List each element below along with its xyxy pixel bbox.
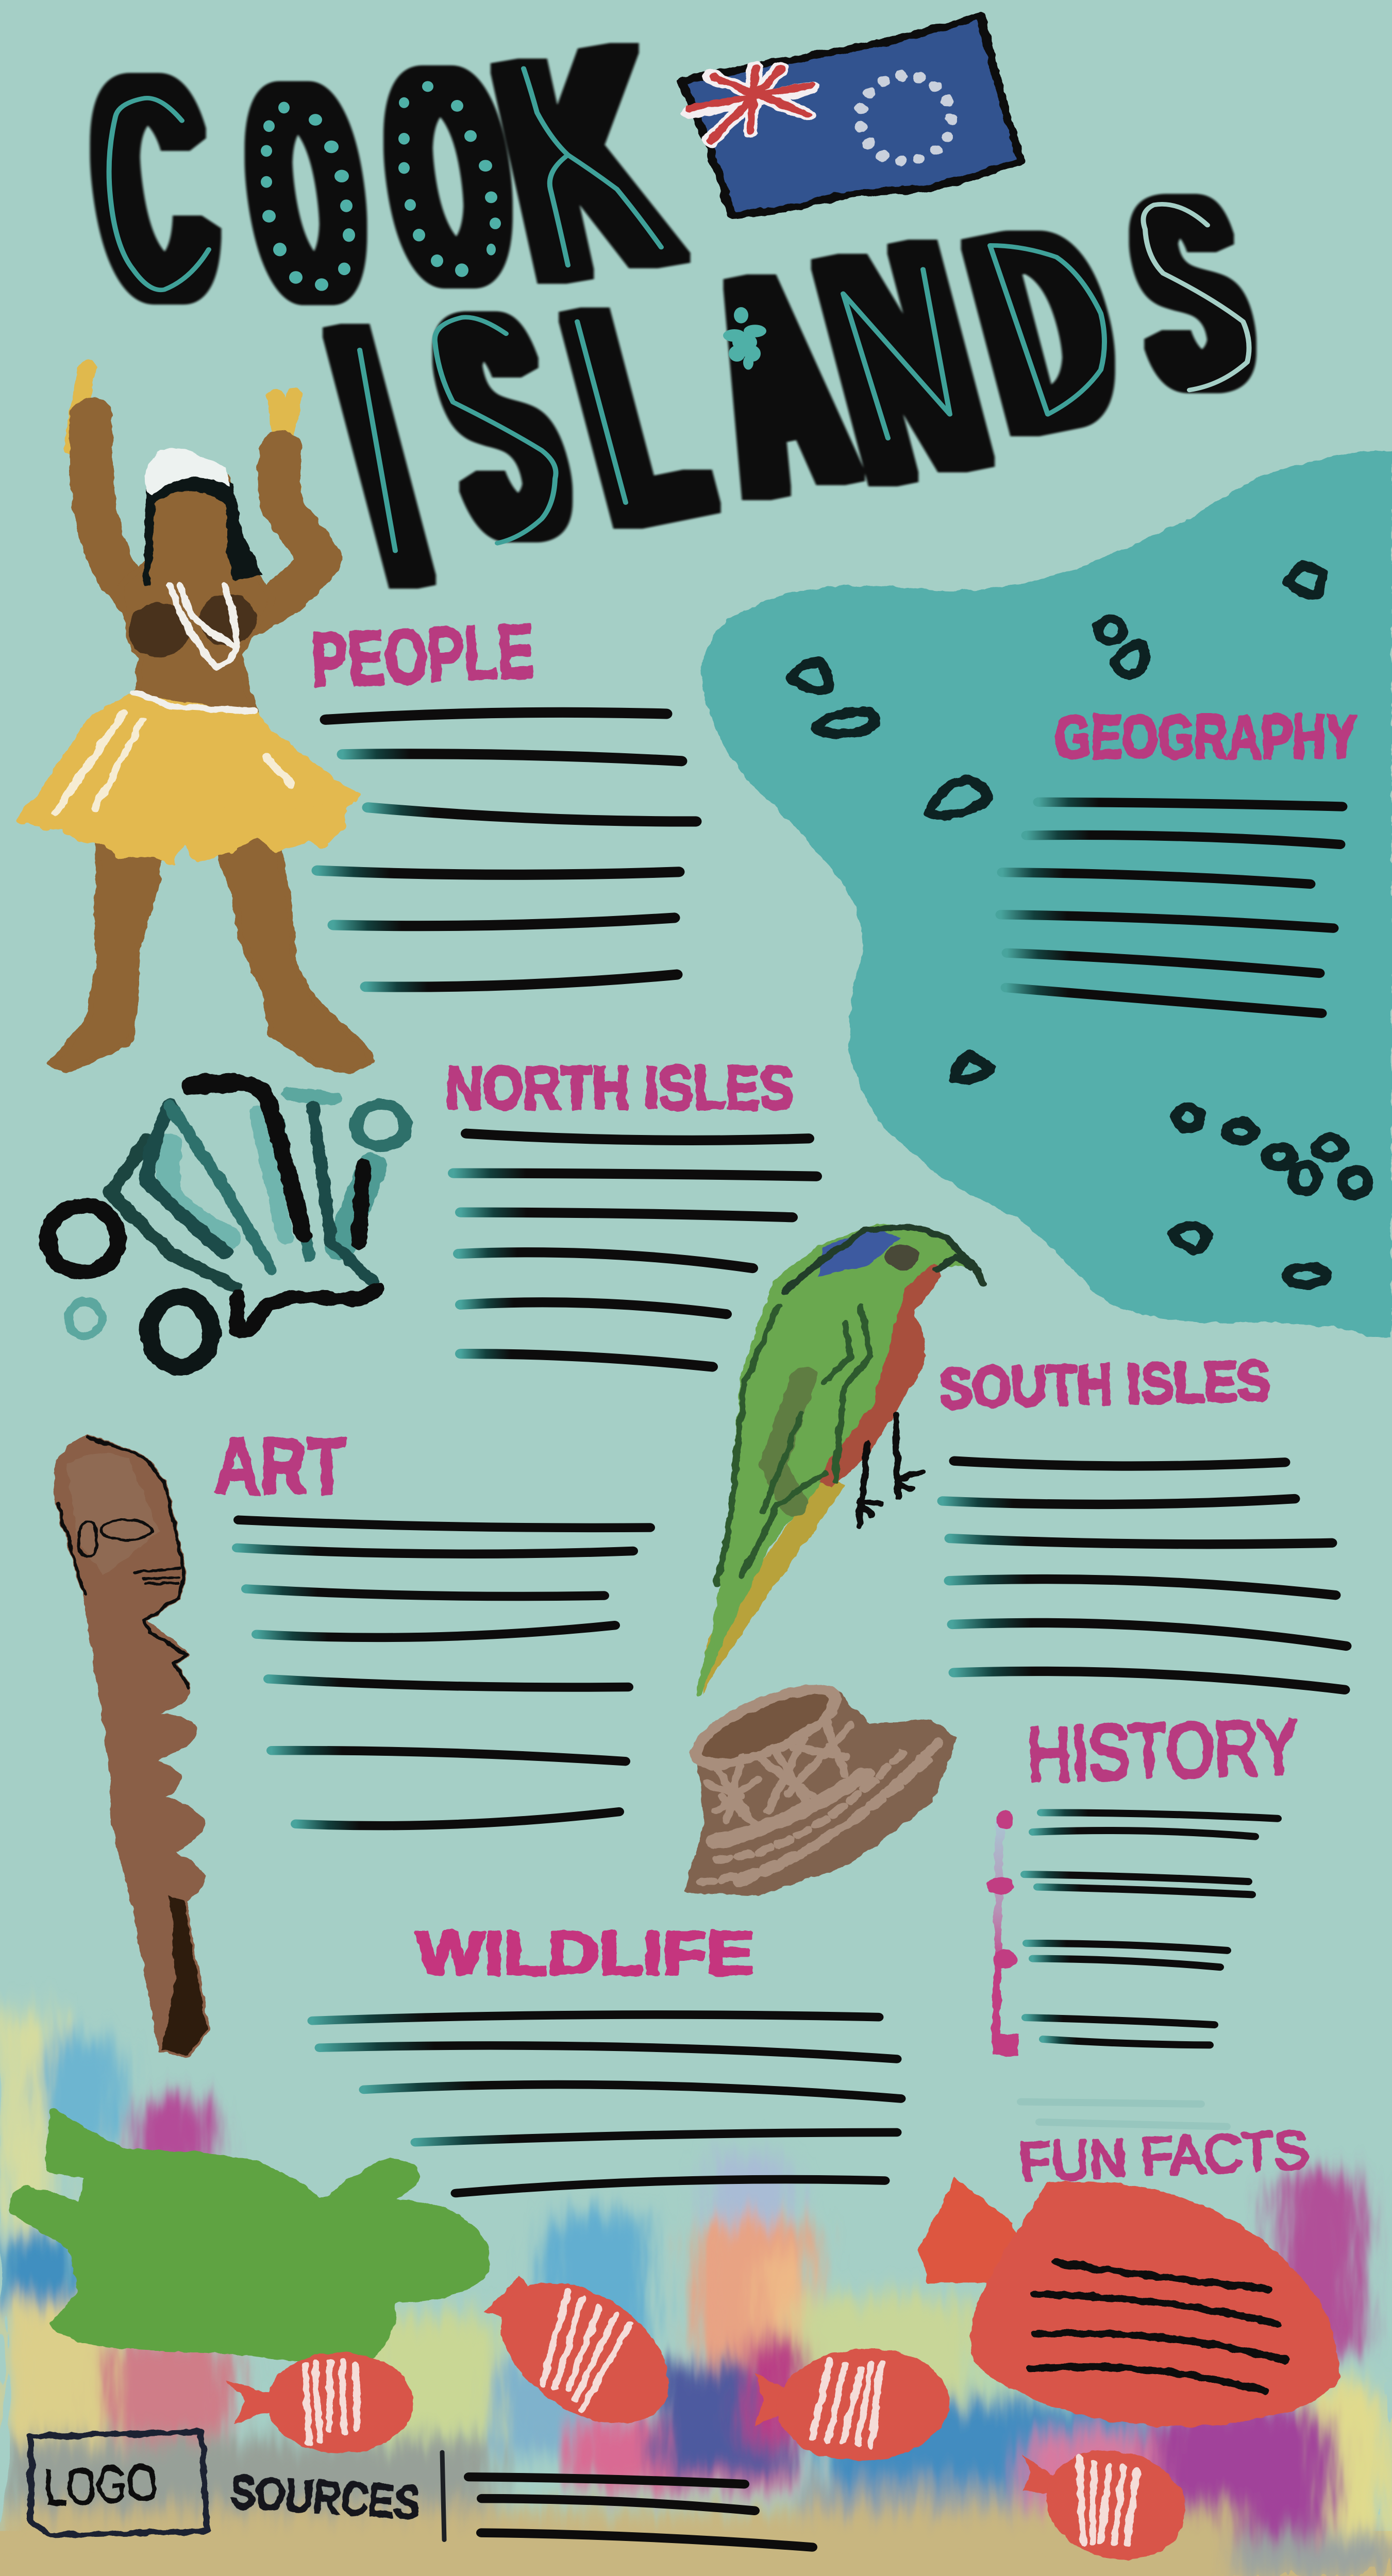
illustration: large fish panel — [919, 2177, 1340, 2427]
text lines: south isles — [943, 1461, 1346, 1690]
shell light washes — [169, 1094, 372, 1247]
shell ribs — [110, 1106, 373, 1286]
fish body — [267, 2352, 413, 2453]
logo text: LOGO — [43, 2453, 159, 2516]
heading: south isles: SOUTH ISLES — [938, 1349, 1271, 1419]
fish stripes — [305, 2362, 357, 2443]
fish stripes — [542, 2292, 630, 2410]
fish tail — [484, 2275, 546, 2337]
bird tail — [702, 1472, 845, 1693]
flag of the Cook Islands — [682, 16, 1021, 215]
fish stripes — [1079, 2459, 1136, 2544]
hat crown lattice — [706, 1720, 866, 1842]
title letters: L — [546, 235, 728, 590]
flag field — [682, 16, 1021, 215]
text lines: geography — [1001, 802, 1342, 1013]
shell black strokes — [193, 1083, 377, 1330]
heading: sources: SOURCES — [228, 2465, 422, 2529]
timeline markers — [987, 1809, 1018, 2056]
stick highlight — [67, 1453, 160, 1576]
title letters: I — [308, 248, 450, 664]
shell bubble bottom — [149, 1297, 211, 1367]
fish tail — [754, 2373, 794, 2426]
title letters: S — [410, 244, 592, 609]
text lines: history — [1025, 1812, 1278, 2045]
fish tail — [226, 2381, 278, 2424]
dancer flower crown — [145, 448, 229, 496]
dancer grass skirt — [23, 696, 355, 861]
illustration: small fish 3 — [754, 2343, 955, 2467]
text lines: people — [317, 713, 696, 987]
fish stripes — [812, 2361, 881, 2446]
fish tail — [1021, 2454, 1062, 2495]
heading: fun facts: FUN FACTS — [1018, 2119, 1310, 2193]
sources divider — [442, 2452, 444, 2540]
watercolour reef band — [0, 2006, 1392, 2576]
bird body — [698, 1225, 969, 1693]
stick shadow — [161, 1896, 207, 2056]
illustration: small fish 2 — [470, 2255, 700, 2451]
shell bubble left — [48, 1206, 118, 1272]
heading: art: ART — [214, 1421, 346, 1510]
history timeline — [987, 1809, 1018, 2056]
stick ear — [78, 1522, 97, 1556]
large fish tail — [919, 2177, 1030, 2283]
hat brim weave — [701, 1743, 938, 1883]
ring of fifteen stars — [855, 70, 957, 166]
title letters — [78, 0, 1267, 664]
illustration: carved stick — [55, 1437, 207, 2056]
title teal inlines and dots — [109, 69, 1249, 551]
text lines: north isles — [454, 1133, 816, 1367]
text lines: fun facts — [1030, 2263, 1285, 2392]
dancer skirt fringe — [22, 766, 355, 861]
text lines: sources — [469, 2477, 812, 2547]
illustration: small fish 1 — [226, 2352, 413, 2453]
title letters: O — [372, 2, 525, 350]
dancer sticks — [72, 367, 294, 488]
title letters: A — [682, 208, 871, 559]
map blob: ocean — [701, 450, 1392, 1337]
dancer skirt highlights — [55, 713, 290, 813]
logo box — [31, 2432, 207, 2535]
bird eye — [886, 1245, 919, 1269]
bird cap — [817, 1227, 900, 1278]
illustration: turtle — [13, 2112, 487, 2361]
faded history lines — [1021, 2102, 1227, 2127]
title: COOK ISLANDS — [78, 0, 1267, 664]
illustration: bird — [698, 1225, 983, 1693]
hat silhouette — [687, 1688, 954, 1893]
heading: north isles: NORTH ISLES — [446, 1054, 794, 1122]
title letters: S — [1116, 137, 1267, 449]
bird beak and head outline — [785, 1227, 983, 1292]
shell ring top right — [356, 1105, 406, 1146]
stick mouth — [136, 1568, 180, 1583]
illustration: dancer — [22, 367, 373, 1072]
large fish body — [971, 2181, 1340, 2427]
illustration: shell — [48, 1083, 406, 1367]
stick eye — [101, 1520, 153, 1540]
logo frame — [31, 2432, 207, 2535]
map islands — [791, 566, 1368, 1285]
illustration: small fish 4 — [1021, 2430, 1206, 2576]
bird legs — [859, 1415, 923, 1527]
text lines: art — [237, 1520, 650, 1826]
fish body — [1026, 2430, 1206, 2576]
fish body — [772, 2343, 955, 2467]
dancer arms and torso — [52, 417, 373, 1072]
dancer hair — [143, 475, 262, 585]
fish body — [470, 2255, 700, 2451]
sand floor — [0, 2531, 1392, 2576]
shell small bubble — [69, 1301, 102, 1336]
title letters: C — [78, 8, 228, 369]
title letters: N — [796, 174, 1009, 551]
stick face outline — [58, 1437, 189, 1689]
bird feathers — [716, 1306, 871, 1585]
title letters: D — [949, 165, 1141, 492]
title letters: O — [233, 19, 379, 367]
text lines: wildlife — [312, 2014, 901, 2193]
dancer bikini top — [128, 594, 256, 657]
bird breast — [819, 1263, 942, 1487]
dancer necklace — [170, 585, 237, 667]
illustration: woven hat — [685, 1675, 954, 1893]
dancer belt — [133, 692, 253, 711]
timeline stem — [996, 1819, 999, 2054]
stick body — [55, 1437, 207, 2056]
heading: wildlife: WILDLIFE — [416, 1919, 754, 1987]
heading: people: PEOPLE — [309, 607, 536, 703]
hat crown rim — [685, 1675, 847, 1778]
union jack canton — [688, 67, 812, 141]
